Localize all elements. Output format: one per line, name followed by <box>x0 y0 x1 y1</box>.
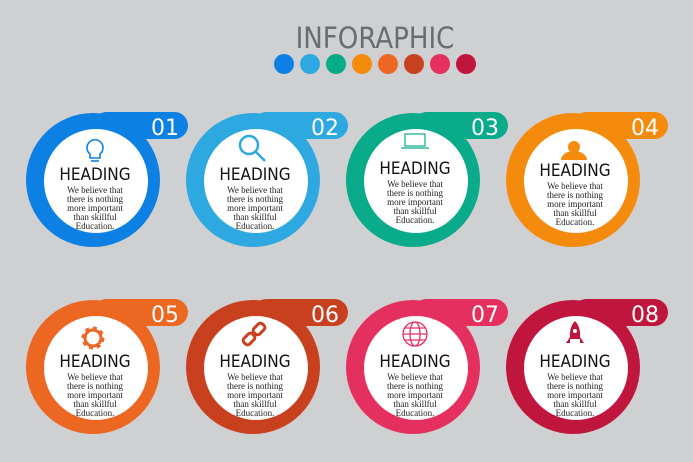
icon: magnifier <box>240 136 265 161</box>
card 08: 08 <box>631 303 659 328</box>
card 08 <box>506 299 668 434</box>
card 03: 03 <box>471 116 499 141</box>
icon: laptop <box>401 134 429 148</box>
icon: rocket <box>566 321 584 343</box>
card 06 <box>186 299 348 434</box>
card 04 <box>506 112 668 247</box>
icon: person <box>561 141 587 160</box>
icon: gear <box>84 329 102 347</box>
icon: link <box>242 322 266 346</box>
icon: bulb <box>87 140 103 161</box>
card 01 <box>26 112 188 247</box>
card 03 <box>346 112 508 247</box>
card 05: 05 <box>151 303 179 328</box>
card 02 <box>186 112 348 247</box>
card 06: 06 <box>311 303 339 328</box>
title: INFORAPHIC <box>296 21 454 55</box>
color dots <box>274 54 476 74</box>
card 05 <box>26 299 188 434</box>
card 07: 07 <box>471 303 499 328</box>
icon: globe <box>403 322 427 346</box>
card 04: 04 <box>631 116 659 141</box>
card 01: 01 <box>151 116 179 141</box>
card 07 <box>346 299 508 434</box>
card 02: 02 <box>311 116 339 141</box>
